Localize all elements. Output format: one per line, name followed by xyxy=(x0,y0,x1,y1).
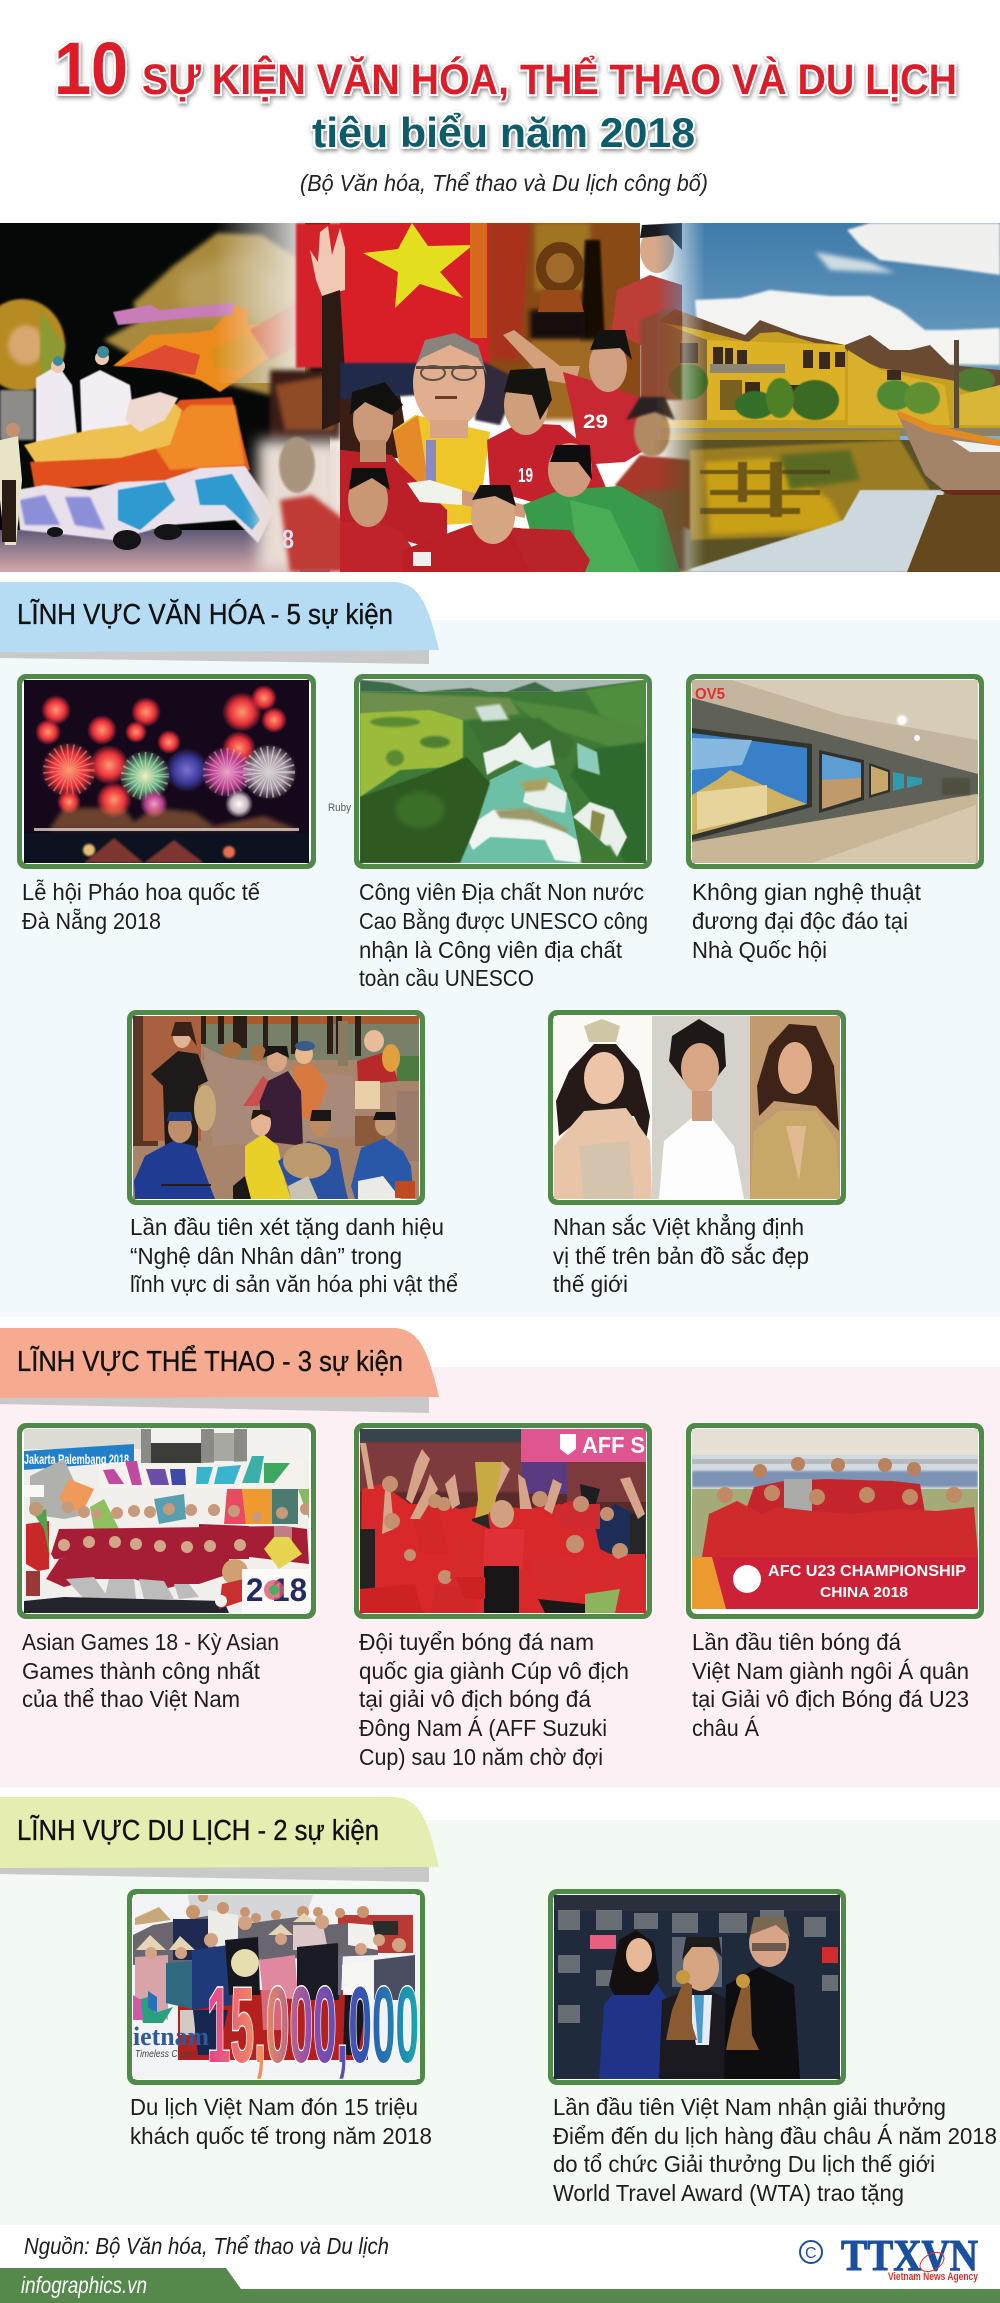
animal mascot xyxy=(222,1559,248,1585)
logo: TTXVN: C xyxy=(805,2245,817,2262)
standing row xyxy=(51,1526,309,1564)
section tab: culture xyxy=(0,582,439,664)
card: 15 million visitors: ietnam xyxy=(133,2022,209,2051)
globe xyxy=(0,299,65,391)
card: fireworks xyxy=(17,674,316,869)
footer bar: infographics.vn xyxy=(21,2272,147,2298)
caption: Không gian nghệ thuật xyxy=(692,879,922,905)
card: National Assembly art space: OV5 xyxy=(695,686,725,703)
card: World Travel Award xyxy=(548,1889,846,2085)
caption: Nhà Quốc hội xyxy=(692,937,827,963)
trees xyxy=(668,364,708,400)
upper falls xyxy=(483,732,555,775)
card: Asian Games: 2 18 xyxy=(246,1572,307,1608)
faded player xyxy=(279,437,315,493)
caption: Du lịch Việt Nam đón 15 triệu xyxy=(130,2094,418,2120)
musician 3 xyxy=(351,1138,413,1199)
caption: quốc gia giành Cúp vô địch xyxy=(359,1658,629,1684)
panel: sports xyxy=(0,1328,1000,1787)
title line 2: tiêu biểu năm 2018 xyxy=(312,109,695,156)
lower falls xyxy=(463,810,582,863)
AFF banner xyxy=(521,1429,646,1462)
caption: nhận là Công viên địa chất xyxy=(359,937,623,963)
title line 1 xyxy=(54,27,957,110)
card: 15 million visitors xyxy=(127,1889,425,2085)
brick walls xyxy=(133,1016,158,1146)
seated row xyxy=(46,1554,229,1589)
puppets xyxy=(293,1064,328,1121)
crowd behind coach xyxy=(340,363,420,400)
back row xyxy=(133,1915,378,1965)
panel background xyxy=(0,620,1000,1317)
card: Asian Games: Jakarta Palembang 2018 xyxy=(24,1451,129,1467)
woman in green scarf xyxy=(26,1521,49,1571)
framed pictures xyxy=(692,728,812,840)
section tab: sports: LĨNH VỰC THỂ THAO - 3 sự kiện xyxy=(17,1344,403,1378)
right forest xyxy=(570,742,646,863)
caption: tại Giải vô địch Bóng đá U23 xyxy=(692,1686,969,1712)
man on left xyxy=(0,436,22,545)
panel background xyxy=(0,1820,1000,2225)
conical hats xyxy=(136,1913,315,1950)
lower players xyxy=(360,1584,425,1613)
caption: Cup) sau 10 năm chờ đợi xyxy=(359,1744,603,1770)
middle: flag and team xyxy=(296,223,690,572)
left player xyxy=(340,450,447,545)
yellow facades xyxy=(660,322,1000,430)
rice terraces xyxy=(360,710,463,797)
card: folk artists xyxy=(127,1010,425,1205)
player 29 xyxy=(503,330,580,385)
suits and dresses xyxy=(135,1955,168,2020)
caption: Games thành công nhất xyxy=(22,1658,261,1684)
caption: Lần đầu tiên Việt Nam nhận giải thưởng xyxy=(553,2094,946,2120)
roofs xyxy=(660,309,1000,388)
singer in yellow xyxy=(245,1134,291,1199)
water reflections xyxy=(690,440,930,540)
fade toward middle xyxy=(215,223,305,383)
musician 1 xyxy=(134,1141,215,1199)
card: 15 million visitors: Timeless Charm xyxy=(135,2049,197,2060)
boat xyxy=(897,413,1000,493)
card: beauty queens xyxy=(548,1010,846,1205)
caption: Đội tuyển bóng đá nam xyxy=(359,1629,594,1655)
middle forest xyxy=(468,718,575,760)
caption: Đông Nam Á (AFF Suzuki xyxy=(359,1715,607,1741)
card: AFC U23: AFC U23 CHAMPIONSHIP xyxy=(768,1563,966,1580)
boat reflection xyxy=(907,495,1000,572)
logo: TTXVN xyxy=(800,2231,979,2283)
mid falls xyxy=(523,780,567,813)
middle: flag and team: 29 xyxy=(583,412,608,433)
faded right player xyxy=(615,455,690,530)
caption: Đà Nẵng 2018 xyxy=(22,907,161,934)
right falls xyxy=(573,802,627,857)
raised hand xyxy=(310,226,345,296)
flag star xyxy=(363,223,473,308)
middle: flag and team: 19 xyxy=(518,465,533,487)
2018 sign xyxy=(242,1569,309,1613)
card: AFC U23: CHINA 2018 xyxy=(820,1584,908,1601)
caption xyxy=(692,879,922,963)
navy suit xyxy=(593,1504,645,1554)
quay xyxy=(660,428,1000,436)
upper stream xyxy=(475,704,510,727)
caption: Lần đầu tiên xét tặng danh hiệu xyxy=(130,1214,444,1240)
Vietnam logo xyxy=(138,1997,173,2023)
caption: Công viên Địa chất Non nước xyxy=(359,879,644,905)
section tab: culture: LĨNH VỰC VĂN HÓA - 5 sự kiện xyxy=(17,597,393,631)
caption: World Travel Award (WTA) trao tặng xyxy=(553,2180,904,2206)
player heads xyxy=(382,1476,628,1584)
front row xyxy=(702,1501,978,1559)
caption: khách quốc tế trong năm 2018 xyxy=(130,2123,432,2149)
dragon body xyxy=(30,397,250,490)
coach xyxy=(393,415,490,525)
caption: Cao Bằng được UNESCO công xyxy=(359,908,648,934)
caption: đương đại độc đáo tại xyxy=(692,908,908,934)
caption xyxy=(22,879,260,934)
water xyxy=(453,760,582,863)
card: AFC U23 xyxy=(686,1423,984,1619)
curtain and emblem xyxy=(490,223,640,403)
caption: tại giải vô địch bóng đá xyxy=(359,1686,591,1712)
caption xyxy=(553,2094,997,2206)
caption: Nhan sắc Việt khẳng định xyxy=(553,1212,804,1240)
caption: Việt Nam giành ngôi Á quân xyxy=(692,1658,969,1684)
coloured bars xyxy=(99,1459,304,1489)
caption: Điểm đến du lịch hàng đầu châu Á năm 2018 xyxy=(553,2123,997,2149)
top right player xyxy=(612,275,682,345)
caption: thế giới xyxy=(553,1271,628,1297)
caption xyxy=(359,1629,629,1770)
phoenix xyxy=(113,305,290,392)
faces xyxy=(145,1915,406,1959)
subtitle: (Bộ Văn hóa, Thể thao và Du lịch công bố) xyxy=(300,170,708,196)
front centre player xyxy=(403,525,555,572)
player 19 xyxy=(487,423,607,510)
raised arms xyxy=(360,1443,645,1534)
left: carnival float: 8 xyxy=(282,524,294,554)
left: carnival float xyxy=(0,223,345,572)
section tab: sports xyxy=(0,1328,439,1413)
caption: châu Á xyxy=(692,1715,760,1741)
ship backdrop xyxy=(188,1895,313,1935)
card: AFF Suzuki Cup xyxy=(354,1423,652,1619)
goalkeeper arm and glove xyxy=(407,480,525,518)
back row xyxy=(747,1479,927,1529)
team jerseys xyxy=(360,1484,645,1613)
logo: TTXVN: TTXVN xyxy=(841,2231,978,2280)
AFC banner xyxy=(692,1557,978,1609)
caption: lĩnh vực di sản văn hóa phi vật thể xyxy=(130,1271,458,1297)
front left player xyxy=(340,520,417,572)
caption: toàn cầu UNESCO xyxy=(359,965,534,991)
middle: flag and team: 20 xyxy=(642,319,661,338)
card: Non nuoc Cao Bang geopark xyxy=(328,674,652,869)
caption: do tổ chức Giải thưởng Du lịch thế giới xyxy=(553,2151,935,2177)
woman in ao dai xyxy=(258,1071,303,1146)
caption xyxy=(22,1629,279,1712)
dancers xyxy=(36,365,78,445)
singer in black xyxy=(151,1051,208,1156)
mascot xyxy=(264,1537,302,1569)
caption: Asian Games 18 - Kỳ Asian xyxy=(22,1629,279,1655)
forest front left xyxy=(360,757,490,863)
trophy xyxy=(475,1462,502,1519)
caption xyxy=(130,1214,458,1297)
section tab: tourism: LĨNH VỰC DU LỊCH - 2 sự kiện xyxy=(17,1813,379,1847)
right: Hoi An old town xyxy=(655,223,1000,572)
background building xyxy=(24,1429,144,1449)
red vehicle xyxy=(338,1915,413,1953)
stray caption: Ruby: Ruby xyxy=(328,802,351,814)
caption: vị thế trên bản đồ sắc đẹp xyxy=(553,1243,809,1269)
section tab: tourism xyxy=(0,1797,439,1882)
goalkeeper xyxy=(523,486,680,572)
stone backdrop xyxy=(104,233,310,395)
clouds xyxy=(847,223,1000,275)
coach xyxy=(483,1529,525,1569)
waves xyxy=(16,466,275,543)
floor xyxy=(24,1597,229,1613)
caption xyxy=(553,1212,809,1297)
caption xyxy=(359,879,648,991)
caption: “Nghệ dân Nhân dân” trong xyxy=(130,1243,402,1269)
title xyxy=(54,27,957,196)
red carpet xyxy=(178,1990,368,2060)
caption xyxy=(692,1629,969,1741)
panel: tourism xyxy=(0,1797,1000,2225)
hero photo collage xyxy=(0,223,1000,572)
games backdrop xyxy=(84,1487,309,1534)
panel background xyxy=(0,1367,1000,1787)
footer bar xyxy=(0,2268,1000,2303)
card: Asian Games xyxy=(17,1423,316,1619)
musician 2 xyxy=(278,1141,348,1199)
caption: Lần đầu tiên bóng đá xyxy=(692,1629,901,1655)
caption: Lễ hội Pháo hoa quốc tế xyxy=(22,879,260,905)
caption: của thể thao Việt Nam xyxy=(22,1686,240,1712)
top windows xyxy=(133,1016,419,1026)
blue banner xyxy=(24,1444,134,1470)
mast xyxy=(954,340,959,428)
panel: culture xyxy=(0,582,1000,1317)
title line 1: 10 xyxy=(54,27,128,110)
source note: Nguồn: Bộ Văn hóa, Thể thao và Du lịch xyxy=(24,2233,389,2259)
caption xyxy=(130,2094,432,2149)
card: National Assembly art space xyxy=(686,674,984,869)
dragon neck and head xyxy=(24,395,182,462)
